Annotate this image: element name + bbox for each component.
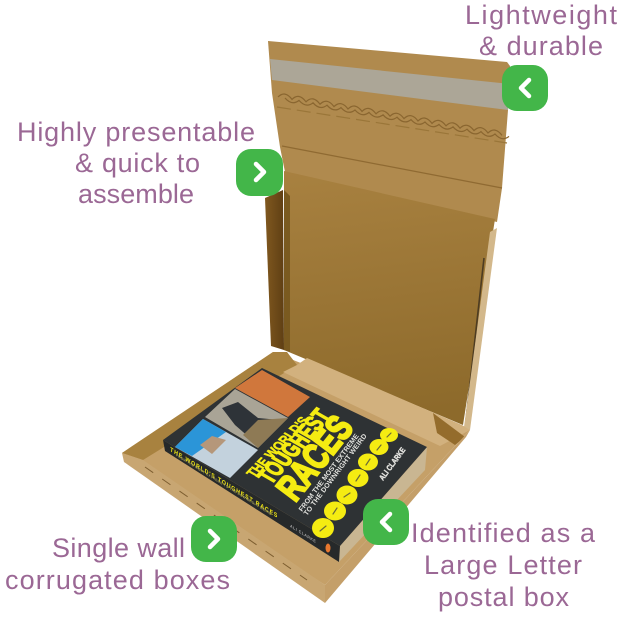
- button: presentable: [236, 149, 283, 196]
- tray back wall: [283, 358, 470, 446]
- button: lightweight: [502, 65, 548, 111]
- button: large letter: [363, 499, 409, 545]
- text: single wall: Single wall: [52, 533, 185, 563]
- tray floor: [122, 352, 470, 585]
- cover photo: snow: [175, 419, 258, 478]
- cover title: FROM THE MOST EXTREME: [298, 433, 361, 513]
- text: large letter: Large Letter: [424, 550, 582, 580]
- cover title: TOUGHEST: [252, 405, 337, 488]
- text: single wall: corrugated boxes: [5, 565, 230, 595]
- book cover: [163, 368, 427, 546]
- book pages: [339, 447, 427, 562]
- text: highly presentable: [17, 117, 255, 209]
- cover yellow icons: [312, 428, 398, 538]
- adhesive tape strip: [270, 59, 510, 110]
- lid right edge strip: [464, 228, 497, 430]
- cover title: RACES: [269, 408, 361, 508]
- cover photo: desert: [235, 370, 310, 417]
- text: highly presentable: assemble: [78, 179, 194, 209]
- perforation line: [145, 467, 307, 580]
- text: single wall: [5, 533, 230, 595]
- cover photo: runner: [205, 389, 288, 448]
- text: lightweight and durable: [465, 0, 617, 61]
- tray back-left wall: [122, 352, 297, 460]
- text: highly presentable: & quick to: [75, 148, 200, 178]
- lid crease line: [282, 146, 502, 188]
- text: large letter: postal box: [438, 582, 570, 612]
- text: lightweight and durable: & durable: [479, 31, 603, 61]
- cover title: TO THE DOWNRIGHT WEIRD: [303, 433, 369, 517]
- text: highly presentable: Highly presentable: [17, 117, 255, 147]
- book spine: [163, 440, 340, 562]
- tray right rim: [325, 430, 470, 603]
- book: [163, 368, 427, 562]
- lid dark side flap: [265, 190, 284, 350]
- cover title: THE WORLD'S: [243, 414, 313, 480]
- book spine author: ALI CLARKE: [290, 523, 316, 544]
- text: lightweight and durable: Lightweight: [465, 0, 617, 30]
- box lid: [265, 41, 510, 430]
- cover title: ALI CLARKE: [377, 445, 408, 482]
- lid top flap: [268, 41, 510, 222]
- icon silhouettes: [320, 433, 391, 531]
- lid main panel: [284, 171, 495, 425]
- lid inner shadow: [284, 190, 290, 352]
- cardboard tray: [122, 352, 470, 603]
- text: large letter: Identified as a: [411, 518, 596, 548]
- book spine title: THE WORLD'S TOUGHEST RACES: [170, 447, 277, 520]
- tray front rim: [122, 453, 325, 603]
- tray corner tab: [433, 413, 465, 445]
- lid right slit: [466, 258, 484, 420]
- publisher logo: [326, 544, 330, 552]
- cover title: [243, 405, 408, 517]
- text: large letter: [411, 518, 596, 612]
- book spine subtitle: FROM THE MOST EXTREME TO THE DOWNRIGHT WEIRD: [176, 453, 272, 517]
- tear strip: [277, 94, 509, 143]
- button: single wall: [191, 516, 237, 562]
